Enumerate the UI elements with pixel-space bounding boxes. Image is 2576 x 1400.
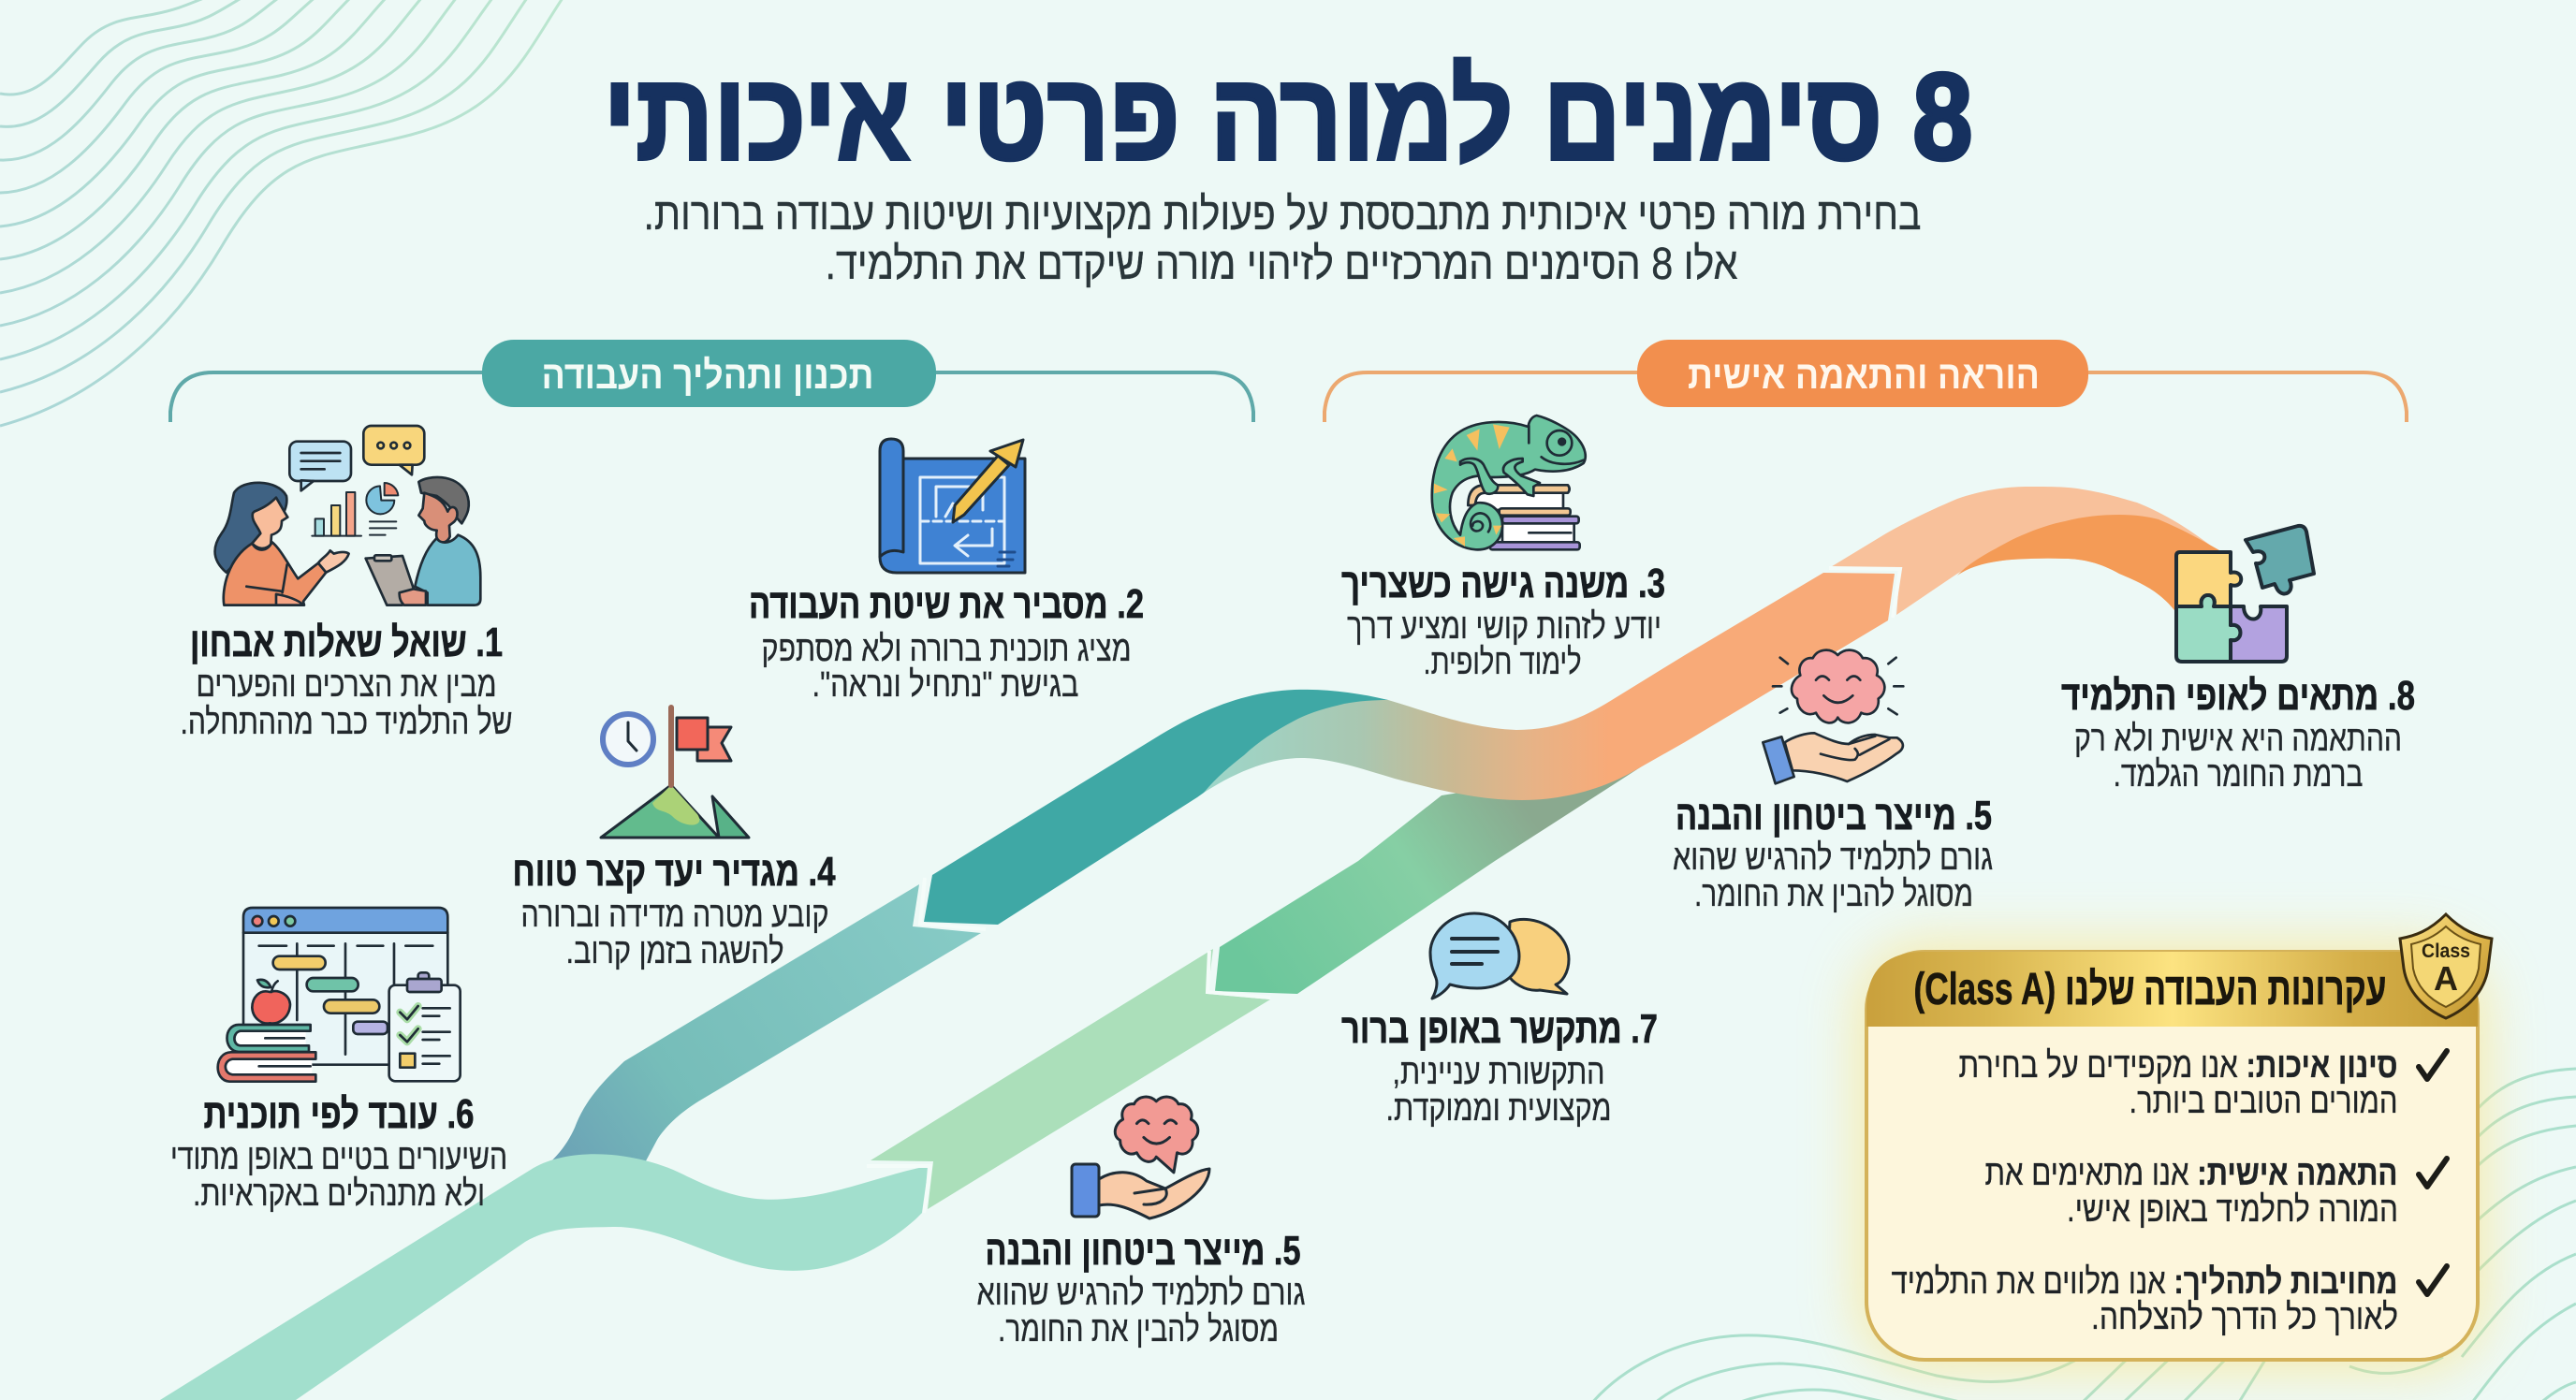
description <box>2074 720 2402 795</box>
subtitle <box>644 190 1921 289</box>
description: להשגה בזמן קרוב. <box>565 932 784 971</box>
section header: planning and work process: תכנון ותהליך העבודה <box>541 353 874 397</box>
icon: blueprint with pencil <box>880 439 1025 573</box>
description: גורם לתלמיד להרגיש שהווא <box>977 1274 1305 1313</box>
step 1 card <box>180 426 513 742</box>
principle: process commitment <box>1891 1262 2447 1337</box>
panel header: עקרונות העבודה שלנו (Class A) <box>1913 965 2387 1014</box>
ribbon path <box>160 487 2237 1400</box>
heading: 6. עובד לפי תוכנית <box>204 1091 474 1137</box>
subtitle: בחירת מורה פרטי איכותית מתבססת על פעולות מקצועיות ושיטות עבודה ברורות. <box>644 190 1921 240</box>
step 3 card <box>1341 416 1665 682</box>
icon: class A shield: A <box>2434 959 2458 998</box>
icon: puzzle pieces <box>2176 526 2314 662</box>
heading: 3. משנה גישה כשצריך <box>1341 561 1665 606</box>
description: יודע לזהות קושי ומציע דרך <box>1347 607 1661 647</box>
heading: 8. מתאים לאופי התלמיד <box>2061 673 2415 719</box>
principle: personal fit <box>1984 1154 2447 1230</box>
description <box>762 630 1131 705</box>
description <box>1347 607 1661 682</box>
description: ההתאמה היא אישית ולא רק <box>2074 720 2402 759</box>
icon: class A shield <box>2400 914 2492 1018</box>
heading: 7. מתקשר באופן ברור <box>1341 1006 1658 1052</box>
principle: quality screening: המורים הטובים ביותר. <box>2129 1082 2398 1121</box>
section header: teaching and personal fit <box>1325 340 2407 422</box>
description: מקצועית וממוקדת. <box>1385 1089 1612 1129</box>
icon: brain with rays above hand <box>1763 650 1903 783</box>
description: של התלמיד כבר מההתחלה. <box>180 703 513 742</box>
icon: chameleon on books <box>1432 416 1586 549</box>
principle: process commitment: מחויבות לתהליך: אנו מלווים את התלמיד <box>1891 1262 2398 1302</box>
step 4 card <box>513 707 836 971</box>
heading: 2. מסביר את שיטת העבודה <box>749 581 1144 627</box>
section header: teaching and personal fit: הוראה והתאמה אישית <box>1688 353 2040 397</box>
icon: class A shield: Class <box>2422 941 2470 962</box>
ribbon: dark orange arch <box>1957 515 2237 610</box>
ribbon: mint start segment <box>160 1154 928 1400</box>
panel: our working principles <box>1858 914 2492 1369</box>
ribbon: colour transition wave <box>1204 573 1895 800</box>
principle: process commitment: לאורך כל הדרך להצלחה. <box>2091 1298 2398 1337</box>
description: קובע מטרה מדידה וברורה <box>520 896 829 935</box>
description: לימוד חלופית. <box>1423 643 1582 682</box>
icon: schedule with books and checklist <box>218 908 461 1082</box>
description: מסוגל להבין את החומר. <box>998 1310 1279 1349</box>
heading: 5. מייצר ביטחון והבנה <box>985 1228 1301 1274</box>
icon: brain above open hand <box>1072 1097 1209 1218</box>
description <box>1385 1053 1612 1129</box>
description: השיעורים בטיים באופן מתודי <box>170 1138 507 1177</box>
description: ברמת החומר הגלמד. <box>2114 755 2363 795</box>
step 8 card <box>2061 526 2415 795</box>
ribbon: light orange arch <box>1829 487 2237 615</box>
principle: personal fit: המורה לחלמיד באופן אישי. <box>2067 1190 2398 1230</box>
principle: personal fit: התאמה אישית: אנו מתאימים את <box>1984 1154 2398 1193</box>
step 5 card (lower) <box>977 1097 1305 1349</box>
description <box>1673 839 1993 914</box>
icon: teacher and student conversation <box>215 426 480 605</box>
icon: goal flag on mountain with clock <box>601 707 749 838</box>
principle: quality screening: סינון איכות: אנו מקפידים על בחירת <box>1958 1046 2398 1086</box>
subtitle: אלו 8 הסימנים המרכזיים לזיהוי מורה שיקדם את התלמיד. <box>826 240 1737 289</box>
description: התקשורת עניינית, <box>1393 1053 1604 1092</box>
description: מבין את הצרכים והפערים <box>197 665 496 705</box>
description: גורם לתלמיד להרגיש שהוא <box>1673 839 1993 878</box>
heading: 5. מייצר ביטחון והבנה <box>1676 793 1992 839</box>
description <box>520 896 829 971</box>
description <box>180 665 513 742</box>
ribbon: green segment <box>1215 763 1647 994</box>
description: מציג תוכנית ברורה ולא מסתפק <box>762 630 1131 669</box>
description <box>977 1274 1305 1349</box>
description: מסוגל להבין את החומר. <box>1694 875 1973 914</box>
ribbon junction seams <box>867 568 1900 1213</box>
description: בגישת "נתחיל ונראה". <box>812 665 1078 705</box>
ribbon: medium teal segment <box>524 884 981 1181</box>
ribbon: light green segment <box>871 949 1270 1209</box>
step 7 card <box>1341 913 1658 1129</box>
heading: 1. שואל שאלות אבחון <box>190 620 503 665</box>
panel header <box>1866 952 2478 1027</box>
description <box>170 1138 507 1214</box>
principle: quality screening <box>1958 1046 2447 1121</box>
description: ולא מתנהלים באקראיות. <box>193 1174 485 1214</box>
title: 8 סימנים למורה פרטי איכותי <box>603 48 1972 185</box>
step 6 card <box>170 908 507 1214</box>
step 2 card <box>749 439 1144 705</box>
icon: speech bubbles <box>1430 913 1569 999</box>
ribbon: dark teal segment <box>924 690 1388 925</box>
section header: planning and work process <box>170 340 1253 422</box>
heading: 4. מגדיר יעד קצר טווח <box>513 849 836 895</box>
step 5 card (upper) <box>1673 650 1993 914</box>
